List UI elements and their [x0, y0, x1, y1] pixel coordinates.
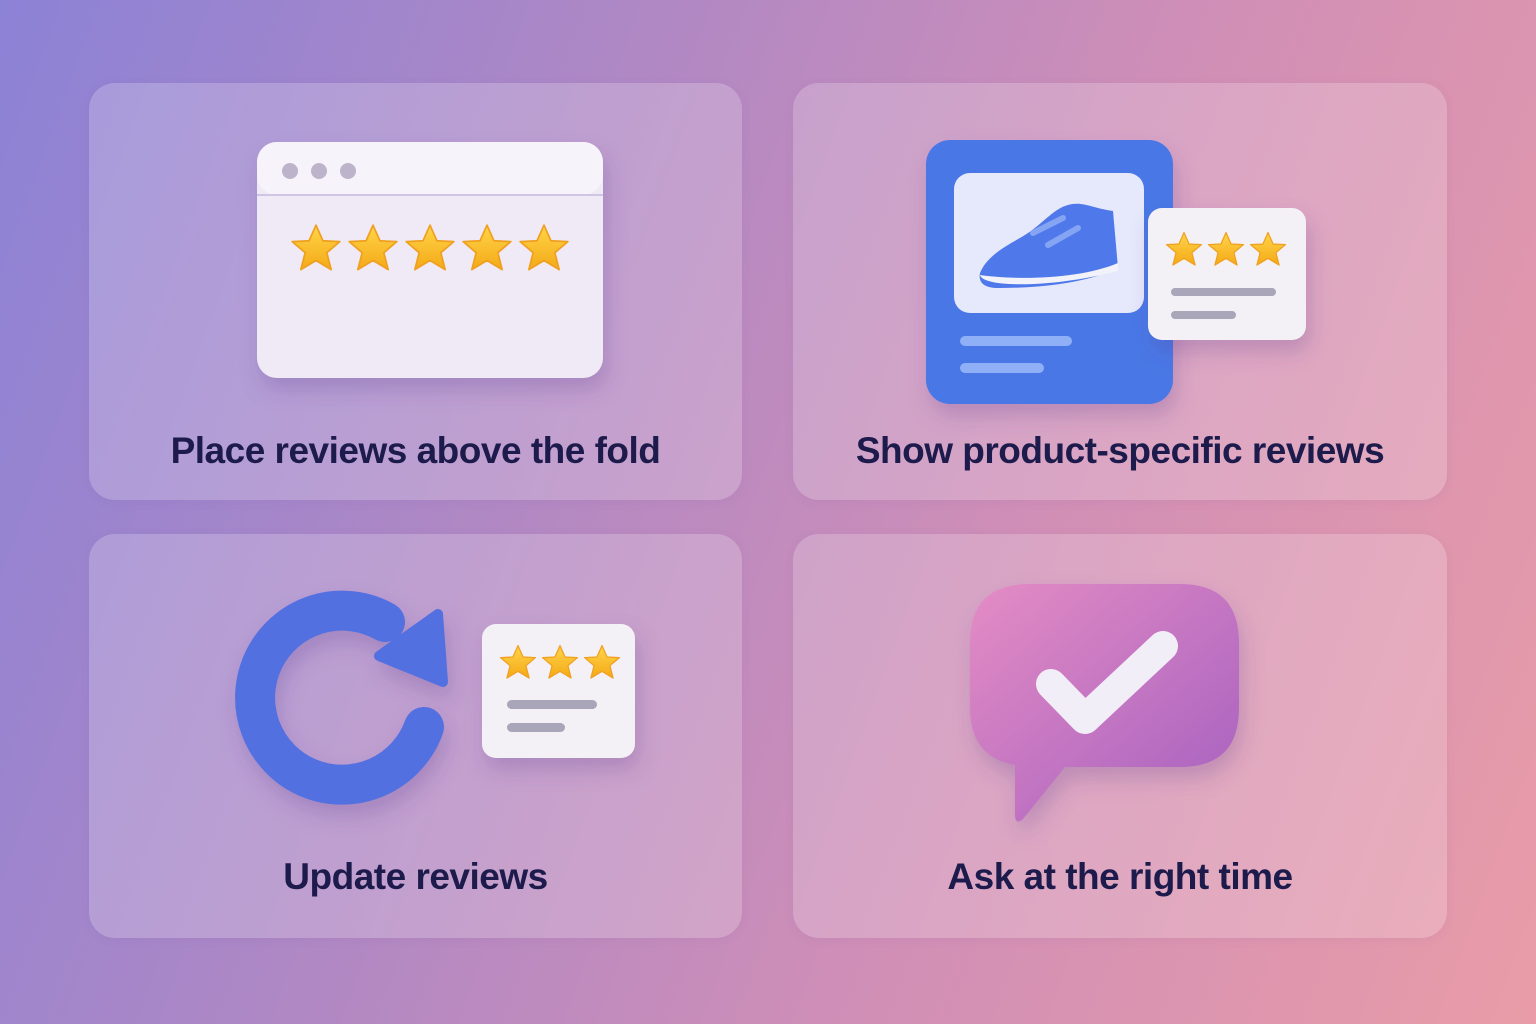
heading: Ask at the right time — [947, 856, 1293, 897]
heading: Place reviews above the fold — [171, 430, 660, 471]
panel: place reviews — [89, 83, 742, 500]
panel: product-specific — [793, 83, 1447, 500]
panel: ask at right time — [793, 534, 1447, 938]
icon: product card with review — [924, 140, 1316, 422]
heading: Show product-specific reviews — [856, 430, 1384, 471]
icon: refresh arrow with review card — [235, 590, 644, 821]
icon: browser window with stars — [257, 142, 612, 394]
panel: update reviews — [89, 534, 742, 938]
icon: speech bubble with check — [968, 584, 1250, 831]
heading: Update reviews — [283, 856, 548, 897]
